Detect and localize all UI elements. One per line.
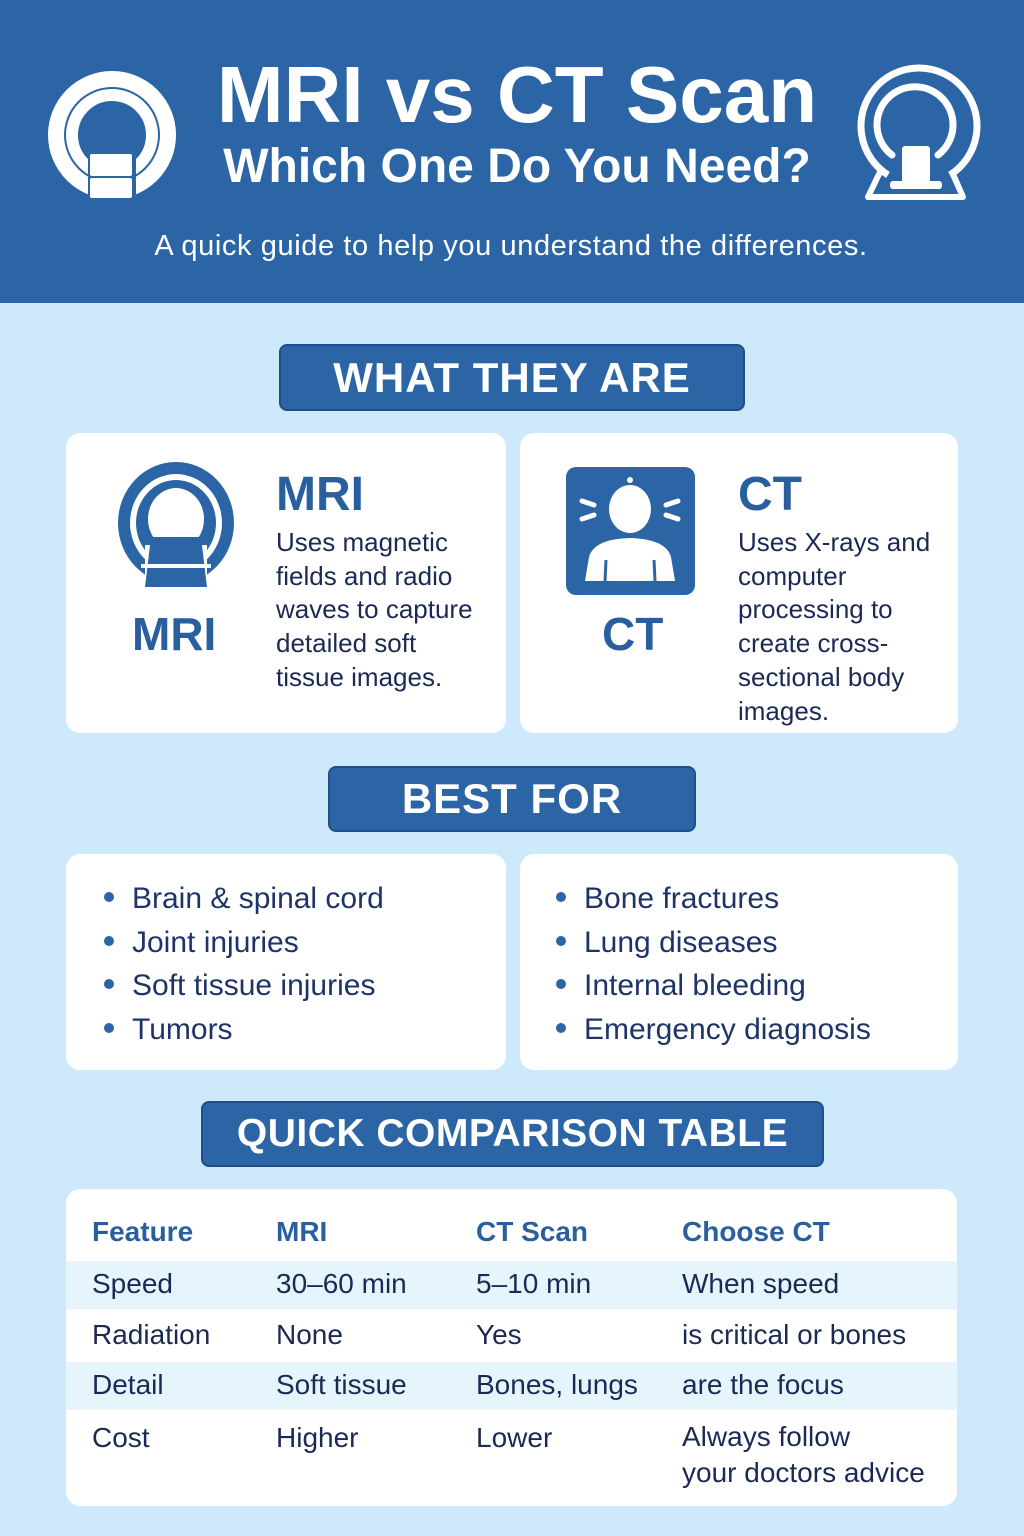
- icon: MRI scanner left: [48, 71, 176, 198]
- row: detail: are the focus: [682, 1369, 844, 1400]
- heading: CT: CT: [738, 468, 802, 521]
- row: cost: Cost: [92, 1422, 150, 1453]
- panel: MRI: [66, 433, 506, 733]
- row: radiation: is critical or bones: [682, 1319, 906, 1350]
- title: MRI vs CT Scan: [217, 50, 817, 139]
- heading: comparison table: [201, 1101, 824, 1167]
- row: radiation: [92, 1319, 906, 1350]
- header band: [0, 0, 1024, 303]
- row: detail: Bones, lungs: [476, 1369, 638, 1400]
- list: MRI uses: Soft tissue injuries: [132, 969, 375, 1002]
- row: cost: Lower: [476, 1422, 552, 1453]
- row: detail: Soft tissue: [276, 1369, 407, 1400]
- heading: comparison table: QUICK COMPARISON TABLE: [237, 1112, 788, 1155]
- row: cost: Higher: [276, 1422, 358, 1453]
- table header row: MRI: [276, 1216, 327, 1247]
- panel: comparison table: [66, 1189, 957, 1506]
- table header row: Choose CT: [682, 1216, 830, 1247]
- row: detail: Detail: [92, 1369, 164, 1400]
- row: radiation: None: [276, 1319, 343, 1350]
- list: CT uses: Internal bleeding: [584, 969, 806, 1002]
- table header row: CT Scan: [476, 1216, 588, 1247]
- icon: CT scanner right: [858, 64, 980, 200]
- icon: MRI: [118, 462, 234, 587]
- row: detail: [66, 1362, 957, 1410]
- row: speed: 5–10 min: [476, 1268, 591, 1299]
- list: MRI uses: [104, 882, 384, 1046]
- tagline: A quick guide to help you understand the differences.: [154, 230, 868, 262]
- list: CT uses: [556, 882, 871, 1046]
- row: cost: Always follow: [682, 1421, 850, 1452]
- row: speed: Speed: [92, 1268, 173, 1299]
- heading: best for: BEST FOR: [402, 775, 622, 822]
- row: radiation: Radiation: [92, 1319, 210, 1350]
- heading: best for: [328, 766, 696, 832]
- list: MRI uses: Tumors: [132, 1012, 233, 1046]
- label: MRI under icon: MRI: [132, 608, 216, 660]
- list: MRI uses: Joint injuries: [132, 926, 299, 958]
- list: CT uses: Emergency diagnosis: [584, 1012, 871, 1046]
- row: cost: your doctors advice: [682, 1457, 925, 1488]
- list: CT uses: Bone fractures: [584, 882, 779, 915]
- text: MRI description: Uses magnetic fields and radio waves to capture detailed soft tissue images.: [276, 527, 473, 692]
- heading: MRI: MRI: [276, 468, 364, 521]
- subtitle: Which One Do You Need?: [223, 140, 811, 193]
- heading: what they are: [279, 344, 745, 411]
- list: MRI uses: Brain & spinal cord: [132, 882, 384, 915]
- row: speed: 30–60 min: [276, 1268, 407, 1299]
- row: speed: When speed: [682, 1268, 839, 1299]
- row: radiation: Yes: [476, 1319, 522, 1350]
- row: speed: [66, 1261, 957, 1309]
- panel: CT best for: [520, 854, 958, 1070]
- heading: what they are: WHAT THEY ARE: [333, 354, 691, 401]
- list: CT uses: Lung diseases: [584, 926, 777, 958]
- panel: MRI best for: [66, 854, 506, 1070]
- table header row: Feature: [92, 1216, 193, 1247]
- table header row: [92, 1216, 830, 1247]
- panel: CT: [520, 433, 958, 733]
- icon: CT person: [566, 467, 695, 595]
- row: cost: [92, 1421, 925, 1488]
- text: CT description: Uses X-rays and computer processing to create cross-sectional body images.: [738, 527, 930, 726]
- label: CT under icon: CT: [602, 608, 663, 660]
